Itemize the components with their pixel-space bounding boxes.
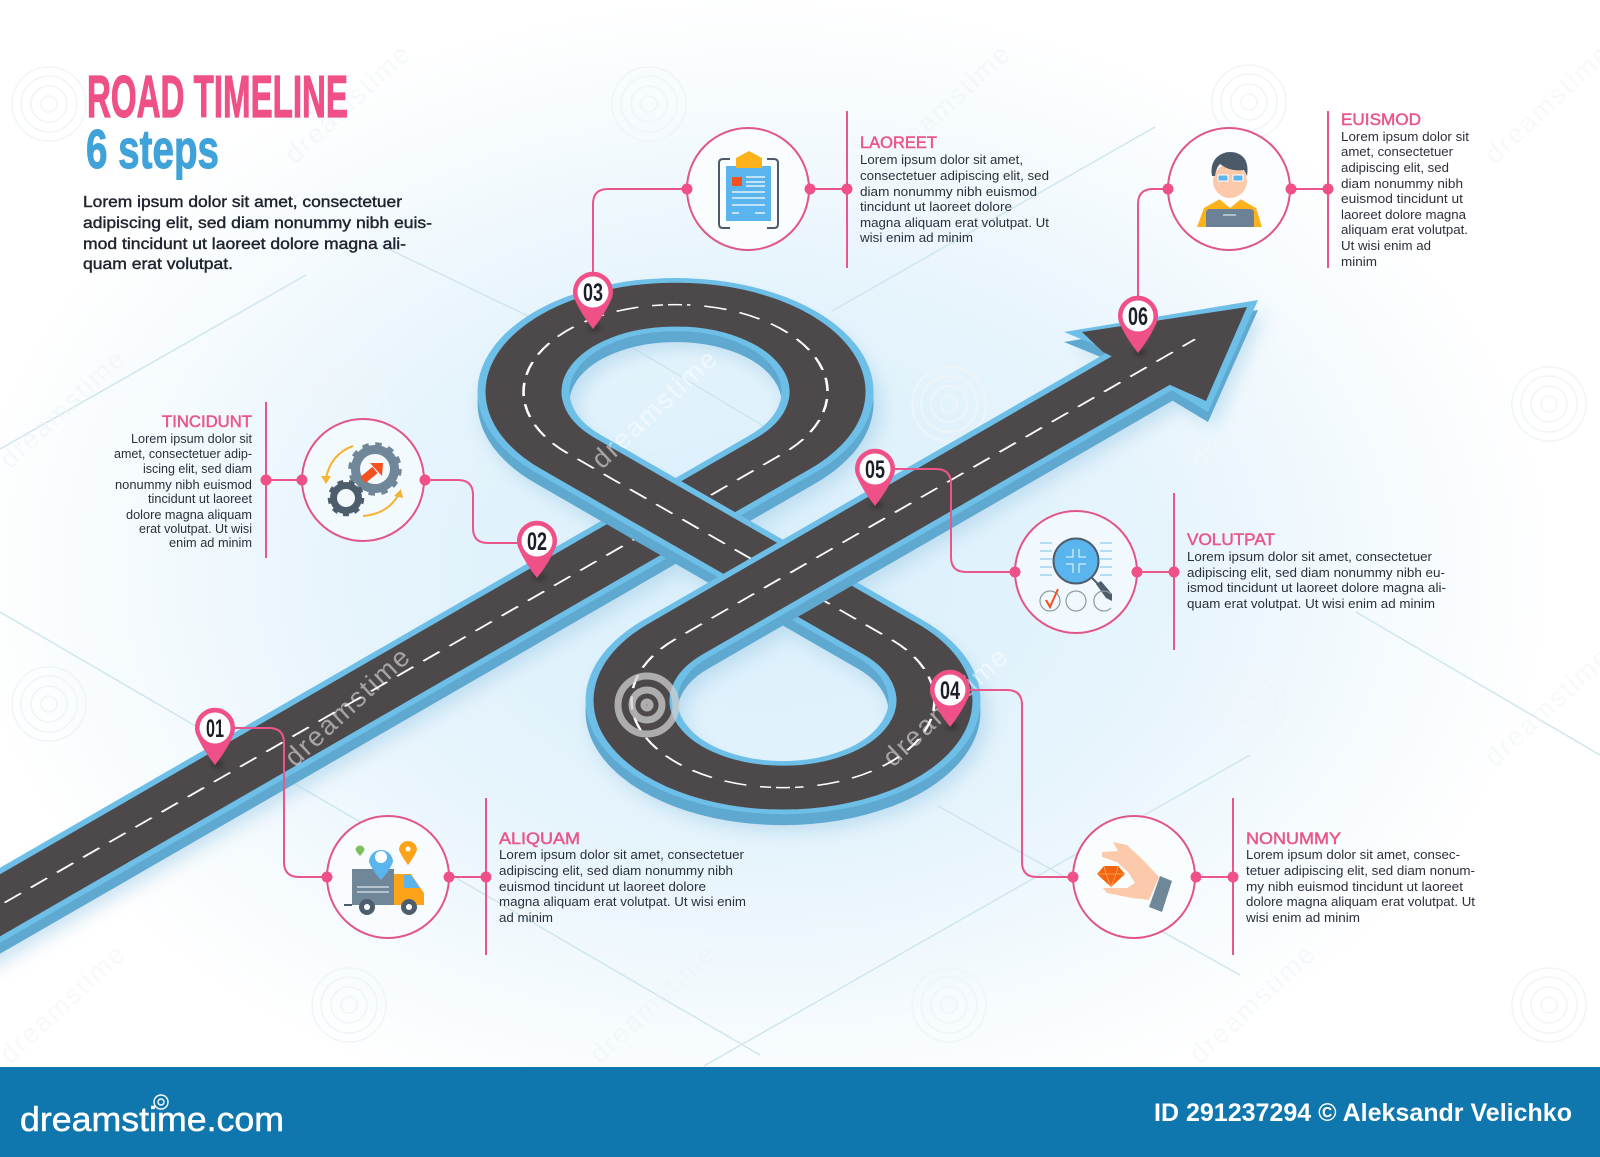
intro text: mod tincidunt ut laoreet dolore magna ali- bbox=[83, 236, 406, 253]
divider 01 bbox=[485, 798, 487, 955]
pin 02 bbox=[517, 521, 557, 580]
divider 05 bbox=[1173, 493, 1175, 650]
intro text bbox=[83, 194, 432, 273]
connector 04 bbox=[950, 690, 1233, 877]
road: descending section bbox=[524, 305, 934, 799]
text 06: adipiscing elit, sed bbox=[1341, 160, 1449, 175]
road ground shadow bbox=[0, 314, 1264, 979]
text 02: nonummy nibh euismod bbox=[115, 477, 252, 492]
text 02 bbox=[114, 412, 252, 550]
step 01: aliquam bbox=[215, 728, 746, 955]
pin 01 bbox=[195, 708, 235, 767]
text 06: EUISMOD bbox=[1341, 110, 1421, 129]
pin 01: 01 bbox=[206, 715, 224, 743]
text 02: dolore magna aliquam bbox=[126, 507, 252, 522]
title: ROAD TIMELINE bbox=[87, 64, 348, 130]
text 02: erat volutpat. Ut wisi bbox=[139, 521, 252, 536]
circle 02 bbox=[302, 419, 424, 541]
icon: clipboard bbox=[719, 151, 778, 228]
text 04: wisi enim ad minim bbox=[1245, 910, 1360, 925]
text 04: NONUMMY bbox=[1246, 829, 1341, 848]
icon: magnifier and checks bbox=[1040, 538, 1112, 611]
dots 01 bbox=[322, 872, 492, 882]
connector 03 bbox=[593, 189, 847, 275]
step 04: nonummy bbox=[950, 690, 1475, 955]
text 01: magna aliquam erat volutpat. Ut wisi enim bbox=[499, 894, 746, 909]
divider 04 bbox=[1232, 798, 1234, 955]
text 03: wisi enim ad minim bbox=[859, 230, 973, 245]
text 05 bbox=[1187, 530, 1446, 611]
text 03 bbox=[859, 133, 1049, 245]
circle 04 bbox=[1073, 816, 1195, 938]
watermark logo on road bbox=[618, 676, 676, 734]
text 04: tetuer adipiscing elit, sed diam nonum- bbox=[1246, 863, 1475, 878]
pin 03 bbox=[573, 272, 613, 331]
text 01 bbox=[499, 829, 746, 925]
text 01: euismod tincidunt ut laoreet dolore bbox=[499, 879, 706, 894]
connector 06 bbox=[1138, 189, 1328, 300]
text 06: Ut wisi enim ad bbox=[1341, 238, 1431, 253]
watermark text: dreamstime bbox=[877, 641, 1015, 772]
divider 02 bbox=[265, 402, 267, 558]
watermark text: dreamstime bbox=[279, 38, 417, 169]
text 05: Lorem ipsum dolor sit amet, consectetuer bbox=[1187, 549, 1433, 564]
pin 04 bbox=[930, 670, 970, 729]
dots 03 bbox=[682, 184, 852, 194]
pin 03: 03 bbox=[583, 279, 603, 307]
title bbox=[86, 64, 348, 180]
pin 04: 04 bbox=[940, 677, 960, 705]
step 02: tincidunt bbox=[114, 402, 520, 558]
text 04: Lorem ipsum dolor sit amet, consec- bbox=[1246, 847, 1460, 862]
watermark text: dreamstime bbox=[279, 641, 417, 772]
text 06 bbox=[1341, 110, 1469, 269]
divider 03 bbox=[846, 111, 848, 268]
dots 04 bbox=[1068, 872, 1238, 882]
text 02: tincidunt ut laoreet bbox=[148, 491, 252, 506]
text 01: ad minim bbox=[499, 910, 553, 925]
circle 03 bbox=[687, 128, 809, 250]
intro text: Lorem ipsum dolor sit amet, consectetuer bbox=[83, 194, 402, 211]
road seam patches bbox=[663, 305, 795, 788]
text 04: my nibh euismod tincidunt ut laoreet bbox=[1246, 879, 1463, 894]
icon: delivery truck bbox=[344, 841, 424, 915]
text 06: euismod tincidunt ut bbox=[1341, 191, 1463, 206]
connector 01 bbox=[215, 728, 486, 877]
road: entry section and upper loop bbox=[0, 305, 828, 974]
text 04: dolore magna aliquam erat volutpat. Ut bbox=[1246, 894, 1475, 909]
text 03: consectetuer adipiscing elit, sed bbox=[860, 168, 1049, 183]
dots 05 bbox=[1010, 566, 1180, 578]
circle 05 bbox=[1015, 511, 1137, 633]
watermark text: dreamstime bbox=[586, 343, 724, 474]
footer banner bbox=[0, 1067, 1600, 1157]
footer credit: ID 291237294 © Aleksandr Velichko bbox=[1154, 1099, 1572, 1127]
connector 05 bbox=[875, 469, 1174, 572]
footer spiral bbox=[154, 1095, 168, 1109]
text 03: tincidunt ut laoreet dolore bbox=[860, 199, 1012, 214]
intro text: quam erat volutpat. bbox=[83, 256, 233, 273]
step 05: volutpat bbox=[875, 469, 1446, 650]
icon: hand holding diamond bbox=[1097, 842, 1172, 912]
divider 06 bbox=[1327, 111, 1329, 268]
intro text: adipiscing elit, sed diam nonummy nibh euis- bbox=[83, 215, 432, 232]
text 02: TINCIDUNT bbox=[162, 412, 252, 431]
text 05: VOLUTPAT bbox=[1187, 530, 1275, 549]
text 01: Lorem ipsum dolor sit amet, consectetuer bbox=[499, 847, 745, 862]
text 02: iscing elit, sed diam bbox=[143, 461, 252, 476]
pin 02: 02 bbox=[527, 528, 547, 556]
watermark text: dreamstime bbox=[1184, 343, 1322, 474]
step 06: euismod bbox=[1138, 110, 1469, 300]
pin 05 bbox=[855, 449, 895, 508]
watermark text: dreamstime bbox=[584, 938, 722, 1069]
pin 06 bbox=[1118, 296, 1158, 355]
text 06: amet, consectetuer bbox=[1341, 144, 1454, 159]
text 04 bbox=[1245, 829, 1475, 925]
text 02: amet, consectetuer adip- bbox=[114, 446, 252, 461]
circle 06 bbox=[1168, 128, 1290, 250]
text 03: Lorem ipsum dolor sit amet, bbox=[860, 152, 1023, 167]
text 06: aliquam erat volutpat. bbox=[1341, 222, 1468, 237]
dots 06 bbox=[1162, 184, 1334, 194]
text 06: minim bbox=[1341, 254, 1377, 269]
watermark text: dreamstime bbox=[879, 38, 1017, 169]
connector 02 bbox=[266, 480, 520, 543]
text 01: ALIQUAM bbox=[499, 829, 580, 848]
watermark text: dreamstime bbox=[1184, 938, 1322, 1069]
icon: gears bbox=[321, 444, 403, 516]
text 05: adipiscing elit, sed diam nonummy nibh eu- bbox=[1187, 565, 1445, 580]
text 06: Lorem ipsum dolor sit bbox=[1341, 129, 1469, 144]
text 06: diam nonummy nibh bbox=[1341, 176, 1463, 191]
footer logo: dreamstime.com bbox=[20, 1101, 284, 1139]
circle 01 bbox=[327, 816, 449, 938]
text 01: adipiscing elit, sed diam nonummy nibh bbox=[499, 863, 733, 878]
text 03: diam nonummy nibh euismod bbox=[860, 184, 1037, 199]
road: lower loop and arrow bbox=[632, 300, 1258, 799]
text 05: quam erat volutpat. Ut wisi enim ad minim bbox=[1187, 596, 1435, 611]
icon: person with laptop bbox=[1197, 152, 1262, 227]
text 03: magna aliquam erat volutpat. Ut bbox=[860, 215, 1049, 230]
pin 06: 06 bbox=[1128, 303, 1148, 331]
text 05: ismod tincidunt ut laoreet dolore magna ali- bbox=[1187, 580, 1446, 595]
text 02: enim ad minim bbox=[169, 535, 252, 550]
pin 05: 05 bbox=[865, 456, 885, 484]
step 03: laoreet bbox=[593, 111, 1049, 275]
text 02: Lorem ipsum dolor sit bbox=[131, 431, 252, 446]
title: 6 steps bbox=[86, 118, 219, 180]
text 03: LAOREET bbox=[860, 133, 937, 152]
text 06: laoreet dolore magna bbox=[1341, 207, 1467, 222]
dots 02 bbox=[260, 474, 430, 486]
